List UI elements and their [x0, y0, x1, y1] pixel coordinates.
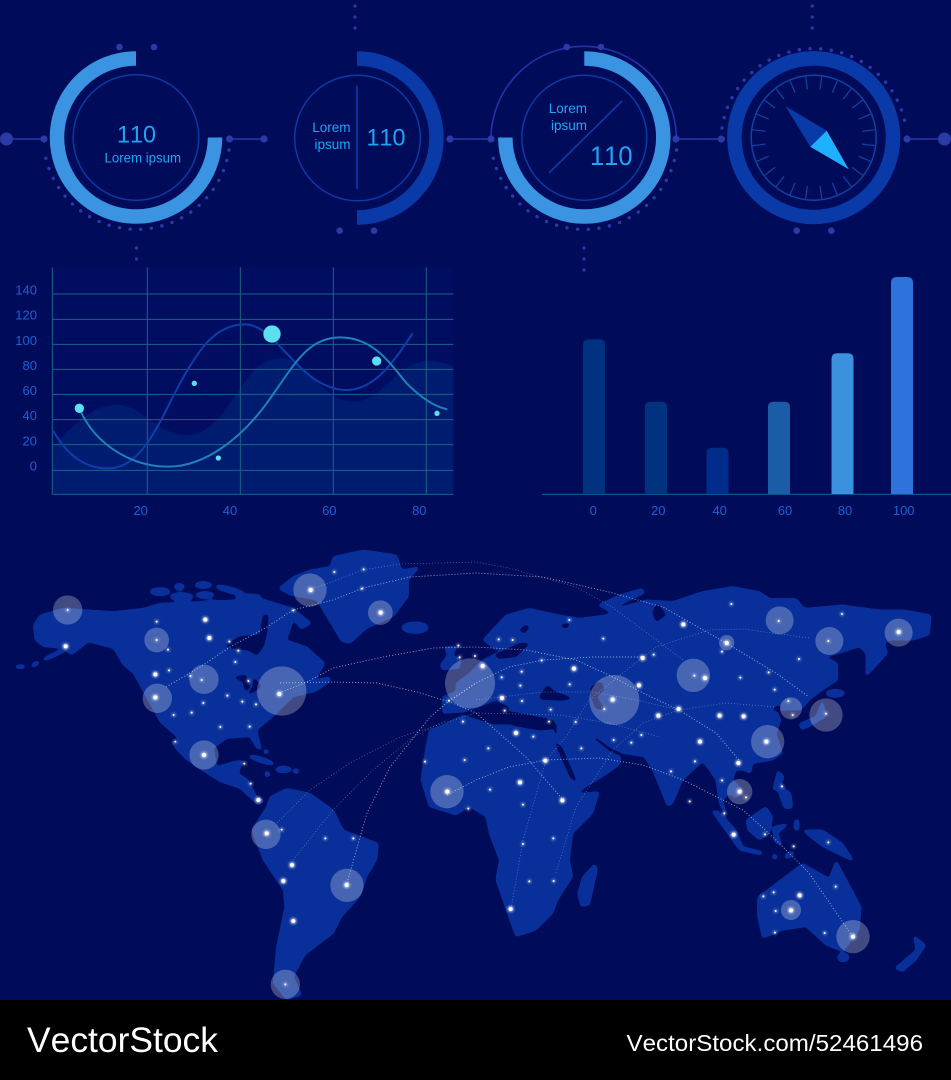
bar 60	[768, 402, 790, 494]
flight arcs	[166, 562, 853, 937]
bar labels: 0	[590, 503, 597, 518]
world map	[15, 550, 931, 999]
y axis labels	[15, 282, 37, 474]
bar 20	[645, 402, 667, 494]
blue line	[53, 324, 413, 468]
east small lights	[487, 651, 837, 934]
arc: Peru to Med	[293, 720, 447, 860]
city halos and lights, east	[445, 603, 913, 953]
North America, Greenland, South America and islands	[15, 550, 428, 999]
bar labels: 80	[838, 503, 852, 518]
footer bar	[0, 1000, 951, 1080]
x axis labels: 80	[412, 503, 427, 518]
Africa, Eurasia, Australia and islands	[421, 587, 931, 972]
y axis labels: 60	[23, 383, 37, 398]
compass inner circle	[751, 75, 876, 200]
gauge 3 nodes	[487, 44, 725, 272]
bar 40	[706, 448, 728, 494]
baseline	[542, 493, 951, 495]
arc: New York to South East Asia	[279, 647, 739, 760]
area series	[52, 358, 453, 494]
Hudson Bay and Great Lakes	[225, 615, 268, 696]
arc: Africa to China	[556, 710, 679, 873]
gauge 2 inner circle	[295, 75, 420, 201]
arc: Greenland to Asia	[310, 562, 683, 660]
gauge 3 arc	[505, 58, 663, 216]
y axis labels: 100	[15, 333, 37, 348]
bar chart	[542, 277, 951, 518]
compass needle dark half	[785, 106, 827, 147]
teal line	[80, 337, 447, 467]
y axis labels: 20	[23, 434, 37, 448]
gauge 1 dotted ring	[44, 149, 229, 229]
gauge 2 arc	[357, 58, 436, 218]
bar 100	[891, 277, 913, 494]
gauge 4: compass	[722, 4, 951, 234]
x axis labels: 20	[133, 503, 148, 518]
y axis labels: 140	[15, 282, 37, 298]
bar 80	[832, 353, 854, 494]
gauge 2: half ring	[295, 4, 454, 234]
gauge 3 inner circle	[522, 75, 647, 200]
gauge 1 nodes	[0, 44, 268, 272]
arc: South Africa to Russia	[511, 629, 809, 909]
gauge 3 dotted ring	[492, 149, 676, 229]
line chart	[15, 267, 453, 518]
gauge 3: diagonal	[487, 44, 725, 272]
y axis labels: 80	[23, 358, 37, 373]
decorative connector dots and lines	[6, 138, 944, 140]
east large lights	[481, 603, 901, 939]
footer url: VectorStock.com/52461496	[626, 1030, 923, 1056]
compass ticks	[753, 77, 875, 199]
footer logo: VectorStock	[27, 1021, 218, 1060]
gauge 2 nodes	[336, 4, 454, 234]
compass nodes	[793, 4, 951, 234]
x axis labels: 40	[223, 503, 237, 518]
compass ring	[734, 58, 893, 217]
gauge 3 thin outer arc	[491, 46, 676, 139]
gauge 3 value: 110	[590, 141, 632, 171]
gauge 2 label: Lorem	[312, 120, 350, 135]
compass dotted ring	[722, 49, 906, 128]
inland seas	[463, 603, 781, 783]
gauge 1 value: 110	[117, 122, 156, 148]
arc: Med to India	[476, 713, 660, 737]
east hemisphere land	[421, 587, 931, 972]
bar 0	[583, 339, 605, 494]
bar labels: 60	[778, 503, 792, 518]
west small lights	[156, 621, 476, 839]
y axis labels: 120	[15, 308, 37, 322]
y axis labels: 0	[30, 458, 37, 474]
arc: Brazil to Europe	[347, 683, 476, 883]
gauge 3 label: Lorem	[549, 101, 587, 116]
arc: Colombia to Med	[277, 713, 476, 823]
x axis labels: 60	[322, 503, 337, 518]
arc: Europe to Asia	[449, 657, 643, 701]
east halos	[445, 606, 913, 953]
west large lights	[64, 568, 449, 985]
gauge 1 arc	[57, 58, 215, 216]
arc: North America to Japan	[166, 573, 809, 697]
bar labels: 40	[712, 503, 727, 518]
gauge 3 label: ipsum	[551, 118, 587, 133]
gauge 1 inner circle	[73, 75, 199, 200]
chart area series and lines	[52, 267, 453, 494]
west hemisphere land	[15, 550, 428, 999]
gauge 1: 110 Lorem ipsum	[0, 44, 268, 272]
gauge 2 divider	[356, 86, 358, 189]
gauge 3 diagonal	[549, 101, 622, 173]
arc: Europe to China	[476, 692, 776, 710]
gauge 1 label: Lorem ipsum	[104, 150, 181, 166]
gauge 2 label: ipsum	[314, 137, 350, 152]
west halos	[53, 573, 464, 999]
city halos and lights, west	[53, 568, 476, 999]
bar labels: 100	[893, 503, 915, 518]
x axis labels	[133, 503, 427, 518]
bar labels: 20	[651, 503, 666, 518]
arc: West Africa to Australia	[447, 758, 853, 937]
bar labels	[590, 503, 915, 518]
chart background	[52, 267, 453, 494]
footer background	[0, 1000, 951, 1080]
y axis labels: 40	[23, 408, 37, 423]
data points	[75, 325, 440, 461]
arc: New York to East Africa	[280, 682, 563, 800]
compass needle bright half	[810, 131, 849, 169]
gauge 2 value: 110	[366, 124, 406, 152]
grid	[52, 267, 453, 494]
